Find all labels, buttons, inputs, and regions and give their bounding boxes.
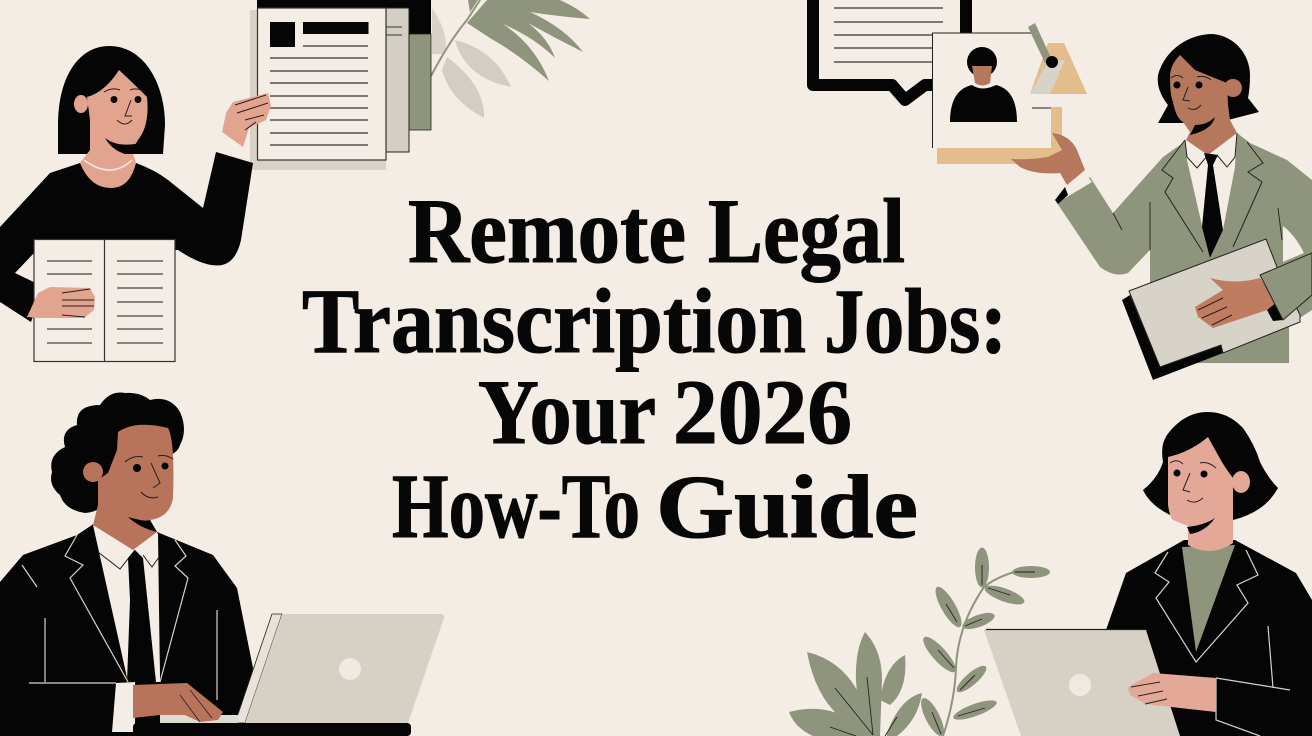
speech bubble document [813, 0, 966, 100]
curly hair [51, 392, 184, 513]
raised hand and cuff [1011, 133, 1085, 185]
figure: woman with book and document [0, 46, 271, 362]
figure: man with laptop [0, 392, 444, 736]
shirt [93, 525, 160, 682]
figure: woman in green suit with folder [1011, 34, 1312, 380]
face and neck [80, 70, 148, 188]
document stack [250, 0, 431, 170]
tie [127, 550, 156, 682]
hair [1143, 412, 1278, 520]
lower sleeve [1260, 253, 1312, 320]
lower hand [1195, 278, 1277, 328]
hair [58, 46, 165, 154]
title: Legal [708, 180, 905, 282]
face and neck [1168, 437, 1233, 551]
hands [27, 287, 95, 318]
hand [1128, 673, 1216, 712]
icon: plant bottom right [789, 548, 1050, 736]
title: Remote [408, 180, 686, 282]
jacket [0, 523, 253, 736]
shirt [1182, 545, 1235, 652]
tie [1202, 153, 1223, 258]
lapels [1162, 140, 1263, 252]
hand [133, 683, 223, 722]
necklace [84, 160, 132, 170]
jacket [1106, 540, 1312, 736]
head [1158, 34, 1259, 123]
suit [1057, 133, 1312, 363]
laptop [235, 614, 282, 723]
title: 2026 [673, 361, 852, 463]
desk [133, 723, 411, 736]
open book [34, 240, 175, 362]
icon: palm leaves top [431, 0, 590, 118]
lapel lines [1155, 550, 1290, 736]
title: Transcription [302, 270, 806, 372]
torso [0, 152, 253, 322]
title: Jobs: [824, 270, 1007, 372]
title: Your [478, 361, 656, 463]
folder [1122, 295, 1223, 380]
title: How-To [392, 455, 640, 557]
lapel lines [22, 535, 217, 700]
face and neck [93, 425, 173, 550]
title: Guide [656, 458, 918, 557]
profile card with tan backing [932, 23, 1087, 164]
title [302, 180, 1007, 557]
shirt [1185, 133, 1237, 258]
laptop [984, 630, 1180, 736]
figure: woman with laptop [984, 412, 1312, 736]
shirt cuff [112, 682, 135, 732]
